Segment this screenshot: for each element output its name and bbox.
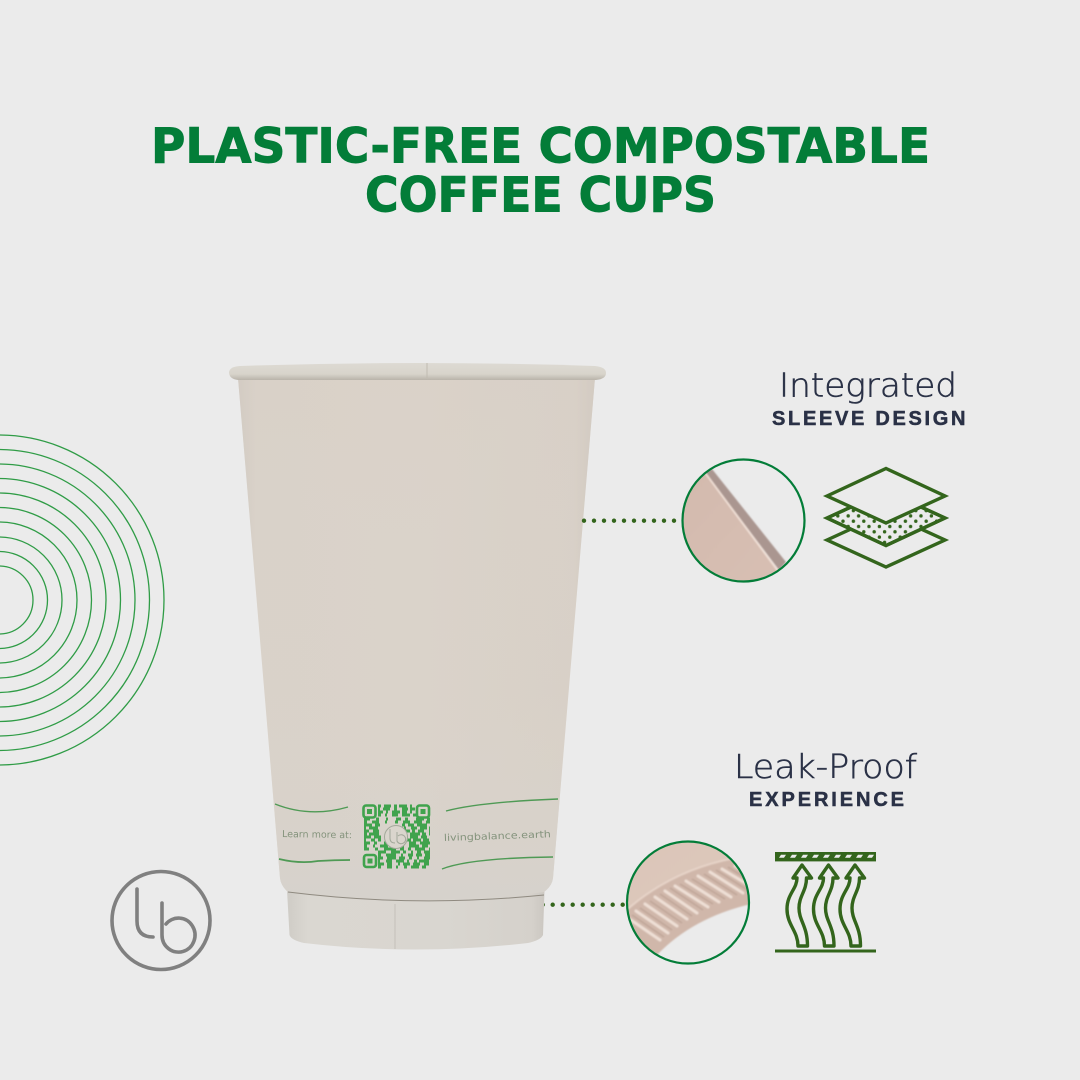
icon: heat rising under hatched barrier (775, 852, 876, 952)
feature heading: leak-proof experience: EXPERIENCE (749, 789, 904, 811)
feature heading: leak-proof experience (734, 748, 918, 811)
cup print swooshes (275, 799, 558, 869)
feature heading: leak-proof experience: Leak-Proof (734, 748, 918, 786)
title (151, 118, 930, 224)
title: PLASTIC-FREE COMPOSTABLE (151, 118, 930, 174)
detail circle: rippled wall photo (626, 840, 750, 965)
icon: layered sleeve (827, 468, 945, 567)
detail circle: sleeve edge photo (681, 458, 806, 583)
hatched bar (775, 852, 876, 861)
dotted connector: sleeve (584, 519, 675, 523)
cup body (238, 378, 595, 900)
title: COFFEE CUPS (365, 168, 716, 224)
feature heading: integrated sleeve design (772, 366, 966, 430)
coffee cup (229, 363, 606, 950)
feature heading: integrated sleeve design: SLEEVE DESIGN (772, 408, 966, 430)
base line (775, 950, 876, 952)
cup rim (229, 363, 606, 380)
concentric circles decoration (0, 435, 164, 765)
cup print text: Learn more at: (282, 829, 352, 841)
dotted connector: lid (543, 903, 625, 907)
cup print text (282, 829, 551, 844)
QR code (364, 806, 430, 867)
rising arrows (787, 865, 864, 946)
cup print text: livingbalance.earth (444, 829, 551, 844)
feature heading: integrated sleeve design: Integrated (779, 366, 957, 404)
logo: lb (112, 872, 210, 970)
cup base (287, 890, 544, 950)
